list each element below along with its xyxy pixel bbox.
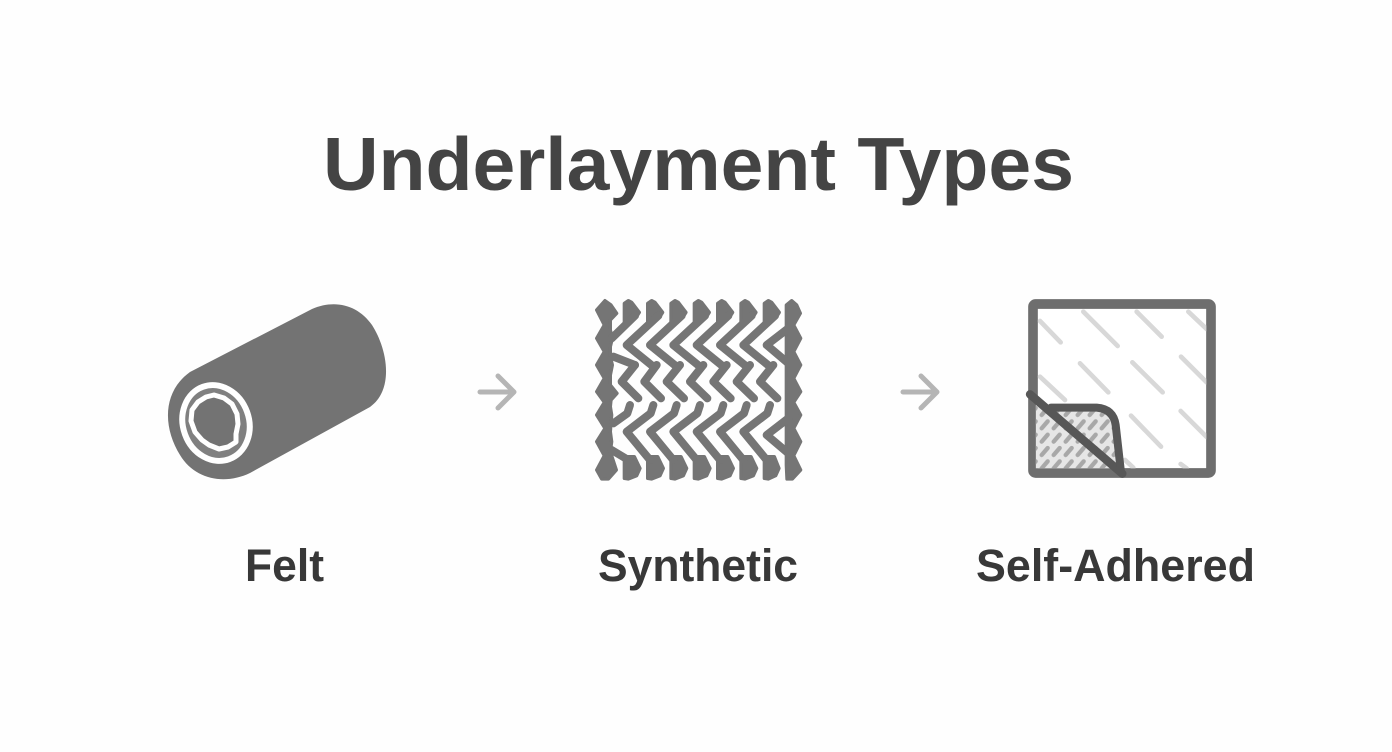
icon: self-adhered sheet with peeled corner — [1030, 304, 1211, 474]
arrow: synthetic to self-adhered — [903, 376, 937, 408]
label: synthetic: Synthetic — [598, 540, 798, 591]
label: felt: Felt — [245, 540, 324, 591]
arrow: felt to synthetic — [480, 376, 514, 408]
icon: felt roll — [168, 304, 386, 479]
label: self-adhered: Self-Adhered — [976, 540, 1255, 591]
title: Underlayment Types — [323, 122, 1074, 206]
icon: synthetic woven mesh — [597, 301, 801, 479]
